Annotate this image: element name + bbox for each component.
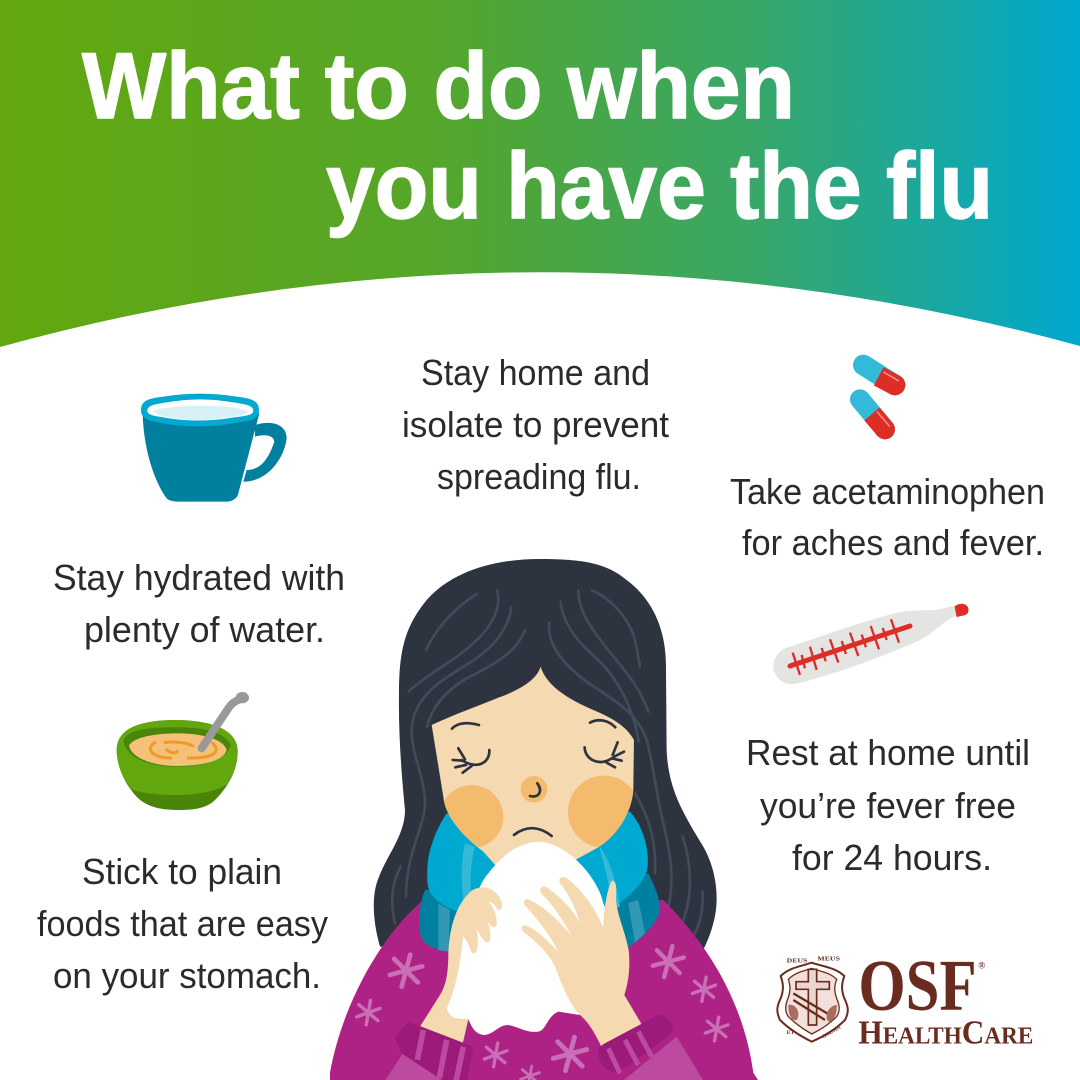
text: plain foods: on your stomach. [53,955,321,996]
hair strands [392,590,703,938]
text: plain foods: Stick to plain [82,851,282,892]
text: acetaminophen: Take acetaminophen [730,471,1045,512]
text: stay home: spreading flu. [437,456,641,497]
text: rest at home: for 24 hours. [792,837,992,878]
logo wordmark: OSF [858,945,977,1026]
text: rest at home: Rest at home until [746,732,1030,773]
tissue [447,842,627,1035]
logo crest: DEUS [787,958,808,965]
text: rest at home [746,732,1030,878]
text: hydrate: Stay hydrated with [53,557,345,598]
icon: soup bowl [117,692,249,810]
text: acetaminophen [730,471,1045,563]
text: stay home: Stay home and [421,352,650,393]
sweater [330,900,760,1080]
logo crest: OMNIA [822,1025,843,1040]
text: plain foods [37,851,328,996]
text: stay home [402,352,669,497]
header banner [0,0,1080,347]
scarf [419,812,660,952]
left hand [420,887,502,1048]
cuffs and sleeves [383,1015,705,1080]
logo wordmark [858,945,1033,1051]
right hand [522,877,643,1051]
text: stay home: isolate to prevent [402,404,669,445]
text: rest at home: you’re fever free [760,785,1016,826]
icon: water cup [141,394,287,502]
face [432,667,640,867]
logo crest: ET [787,1031,795,1036]
icon: pills [860,365,898,429]
text: acetaminophen: for aches and fever. [742,522,1044,563]
text: plain foods: foods that are easy [37,903,328,944]
logo wordmark: ® [978,960,985,971]
logo crest [777,956,848,1042]
icon: thermometer [773,604,969,684]
text: hydrate [53,557,345,650]
logo crest: MEUS [817,956,841,963]
snowflakes [356,943,729,1080]
title: you have the flu [326,133,993,238]
illustration: sick girl with tissue [330,559,760,1080]
hair [374,559,717,957]
logo wordmark: HEALTHCARE [858,1014,1033,1051]
title: What to do when [82,33,795,138]
text: hydrate: plenty of water. [84,609,325,650]
logo: OSF HealthCare [777,945,1033,1051]
title [82,33,993,238]
